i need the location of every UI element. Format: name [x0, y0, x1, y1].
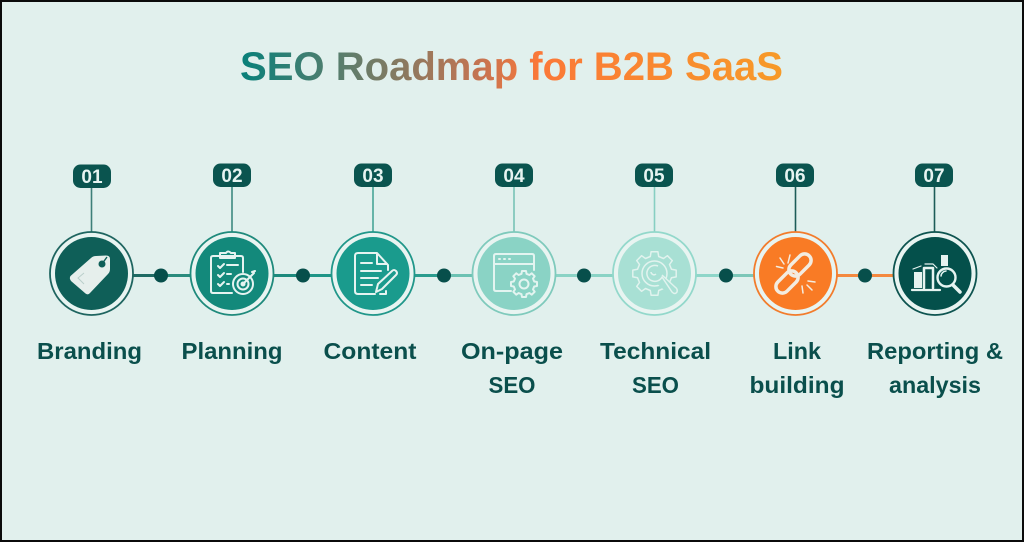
step 04: on-page SEO: [461, 164, 563, 398]
connector: 4 to 5: [556, 268, 613, 282]
label: Link building: [750, 338, 844, 398]
label: Content: Content: [324, 338, 417, 364]
label: Planning: Planning: [182, 338, 282, 364]
icon: bar chart with magnifier: [912, 255, 960, 292]
icon: chain link: [773, 251, 815, 296]
icon: clipboard with target: [211, 252, 255, 294]
badge 05: 05: [643, 166, 665, 187]
label: On-page SEO: [461, 338, 563, 398]
label: Link building: building: [750, 372, 844, 398]
label: Technical SEO: SEO: [632, 372, 679, 398]
badge 06: [776, 164, 814, 187]
icon: price tag: [70, 256, 110, 294]
label: Technical SEO: [600, 338, 711, 398]
label: On-page SEO: On-page: [461, 338, 563, 364]
icon: document with pencil: [355, 253, 397, 294]
badge 06: 06: [784, 166, 806, 187]
badge 01: 01: [81, 167, 103, 188]
connector: 6 to 7: [837, 268, 893, 282]
label: Technical SEO: Technical: [600, 338, 711, 364]
step 05: technical SEO: [600, 164, 711, 398]
badge 04: [495, 164, 533, 187]
badge 02: 02: [221, 166, 243, 187]
label: Reporting and analysis: analysis: [889, 372, 981, 398]
badge 05: [635, 164, 673, 187]
node circle 04: [472, 232, 556, 315]
node circle 07: [894, 232, 976, 315]
node circle 03: [332, 232, 414, 315]
label: Branding: Branding: [37, 338, 142, 364]
step 06: link building: [750, 164, 844, 398]
connector: 5 to 6: [696, 268, 754, 282]
step 07: reporting and analysis: [867, 164, 1003, 398]
icon: gear with wrench: [633, 252, 677, 295]
label: Link building: Link: [773, 338, 821, 364]
badge 02: [213, 164, 251, 187]
connector: 2 to 3: [274, 268, 332, 282]
badge 07: [915, 164, 953, 187]
connector: 3 to 4: [415, 268, 473, 282]
badge 07: 07: [923, 166, 945, 187]
badge 04: 04: [503, 166, 525, 187]
step 03: content: [324, 164, 417, 364]
node circle 02: [190, 232, 274, 315]
node circle 06: [754, 232, 837, 315]
label: On-page SEO: SEO: [488, 372, 536, 398]
badge 03: 03: [362, 166, 384, 187]
label: Reporting and analysis: Reporting &: [867, 338, 1003, 364]
badge 03: [354, 164, 392, 187]
node circle 01: [50, 232, 133, 315]
label: Reporting and analysis: [867, 338, 1003, 398]
badge 01: [73, 164, 111, 188]
step 02: planning: [182, 164, 282, 364]
connector: 1 to 2: [132, 268, 190, 282]
node circle 05: [613, 232, 696, 315]
title: SEO Roadmap for B2B SaaS: [240, 45, 783, 89]
icon: browser window with gear: [494, 254, 537, 297]
step 01: branding: [37, 164, 142, 364]
